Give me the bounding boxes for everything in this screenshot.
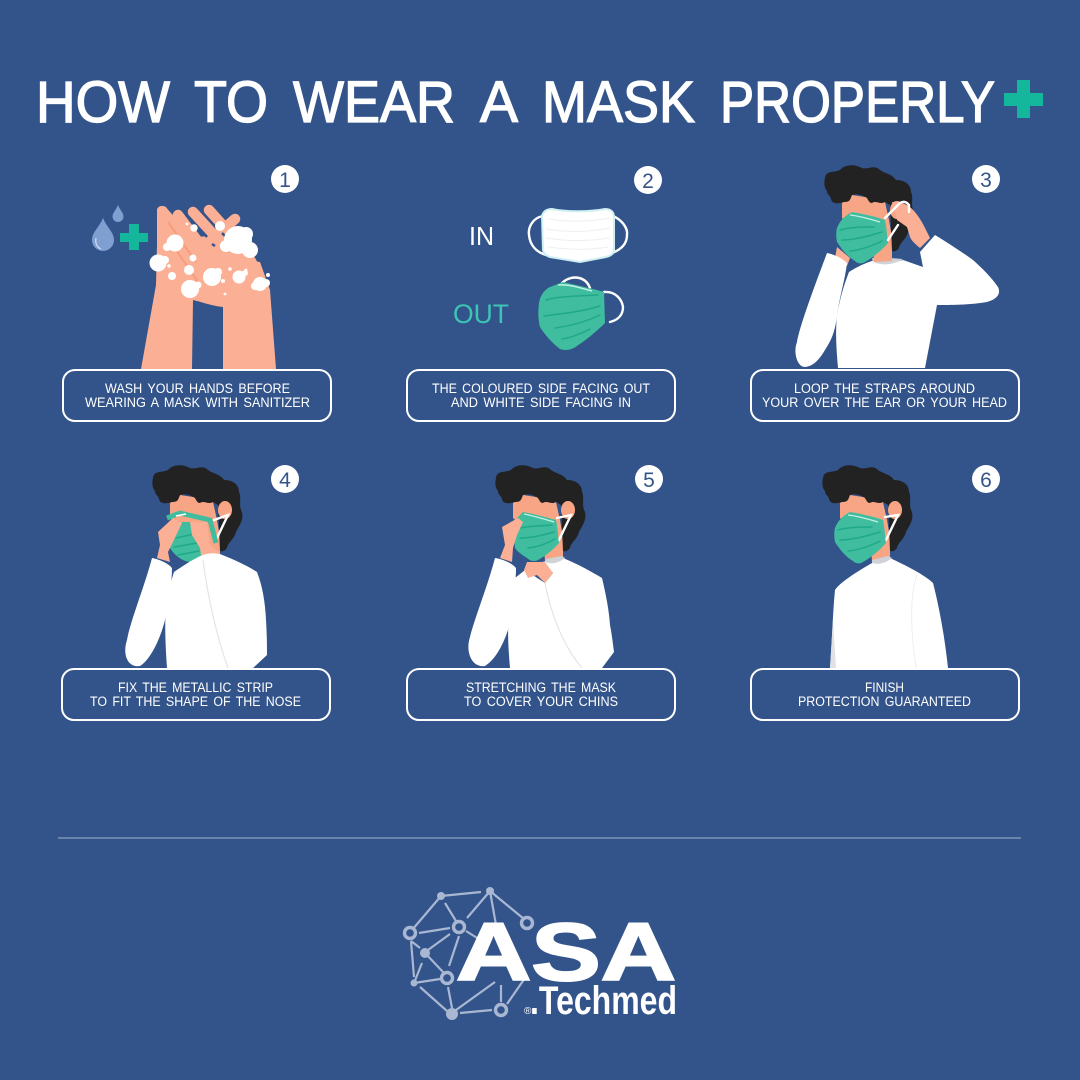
logo registered mark: ®	[524, 1006, 532, 1017]
caption box 4	[62, 669, 330, 720]
title: A	[480, 70, 518, 135]
icon: title plus	[1004, 80, 1043, 118]
caption box 6: FINISH	[865, 680, 904, 695]
logo: ASA Techmed	[404, 887, 677, 1023]
number badge 5: 5	[643, 469, 655, 492]
panel: step 6 finish	[751, 465, 1019, 720]
number badge 6	[972, 465, 1000, 493]
number badge 3: 3	[980, 169, 992, 192]
label: IN: IN	[469, 221, 494, 251]
logo network icon	[404, 887, 532, 1020]
panel: step 3 loop straps	[751, 165, 1019, 421]
title: HOW	[36, 70, 170, 135]
caption box 6	[751, 669, 1019, 720]
number badge 4	[271, 465, 299, 493]
icon: water drops	[92, 205, 124, 251]
illustration: person stretching mask	[468, 465, 614, 668]
logo wordmark ASA: ASA	[456, 907, 676, 998]
caption box 5	[407, 669, 675, 720]
label: OUT: OUT	[453, 299, 509, 329]
number badge 5	[635, 465, 663, 493]
caption box 3: YOUR OVER THE EAR OR YOUR HEAD	[762, 395, 1007, 410]
caption box 2	[407, 370, 675, 421]
panel: step 5 stretch to chin	[407, 465, 675, 720]
panel: step 4 fix metallic strip	[62, 465, 330, 720]
title	[36, 70, 995, 135]
caption box 1	[63, 370, 331, 421]
caption box 5: STRETCHING THE MASK	[466, 680, 616, 695]
caption box 4: FIX THE METALLIC STRIP	[118, 680, 273, 695]
caption box 3: LOOP THE STRAPS AROUND	[794, 381, 975, 396]
caption box 5: TO COVER YOUR CHINS	[464, 694, 618, 709]
number badge 4: 4	[279, 469, 291, 492]
caption box 3	[751, 370, 1019, 421]
icon: green plus	[120, 224, 148, 250]
illustration: green mask outer side	[538, 278, 623, 350]
number badge 1: 1	[279, 169, 291, 192]
number badge 2	[634, 166, 662, 194]
caption box 2: AND WHITE SIDE FACING IN	[451, 395, 631, 410]
logo wordmark Techmed: .Techmed	[530, 979, 677, 1023]
number badge 6: 6	[980, 469, 992, 492]
illustration: person wearing mask	[822, 465, 948, 668]
panel: step 2 mask sides	[407, 166, 675, 421]
illustration: person fixing nose strip	[125, 465, 267, 668]
title: PROPERLY	[720, 70, 995, 135]
divider	[58, 837, 1021, 839]
title: MASK	[542, 70, 695, 135]
caption box 2: THE COLOURED SIDE FACING OUT	[432, 381, 650, 396]
caption box 1: WASH YOUR HANDS BEFORE	[105, 381, 290, 396]
illustration: white mask inner side	[529, 209, 627, 262]
number badge 3	[972, 165, 1000, 193]
illustration: person looping straps	[795, 165, 999, 368]
caption box 4: TO FIT THE SHAPE OF THE NOSE	[90, 694, 301, 709]
number badge 1	[271, 165, 299, 193]
title: WEAR	[293, 70, 455, 135]
caption box 1: WEARING A MASK WITH SANITIZER	[85, 395, 310, 410]
title: TO	[194, 70, 268, 135]
number badge 2: 2	[642, 170, 654, 193]
caption box 6: PROTECTION GUARANTEED	[798, 694, 971, 709]
illustration: washing hands with foam	[141, 206, 276, 369]
panel: step 1 wash hands	[63, 165, 331, 421]
